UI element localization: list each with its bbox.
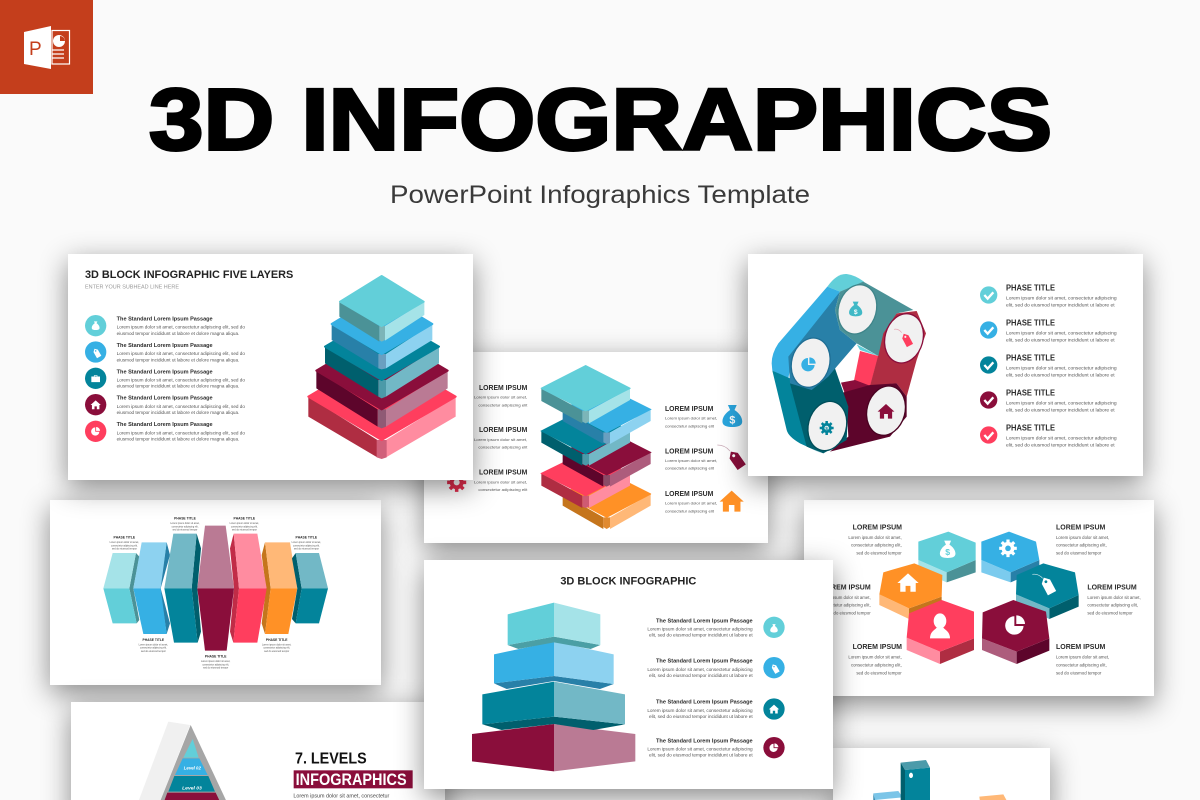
icon: pie [801, 357, 816, 371]
text: lorem ipsum bottom right: Lorem ipsum dolor sit amet, [1056, 655, 1109, 660]
text: lorem ipsum bottom left: Lorem ipsum dolor sit amet, [848, 655, 902, 660]
icon: house [720, 491, 744, 512]
text: right lorem 2: Lorem ipsum dolor sit amet, [665, 459, 717, 463]
slide: bar chart cropped [833, 748, 1050, 800]
slide: stacked blocks [424, 352, 768, 543]
list item 4: eiusmod tempor incididunt ut labore et dolore magna aliqua. [117, 410, 239, 415]
text: right lorem 2 [665, 448, 717, 471]
text: lorem ipsum top left: consectetur adipiscing elit, [851, 543, 902, 548]
text: right lorem 1: consectetur adipiscing elit [665, 424, 715, 428]
block: teal [541, 408, 630, 466]
block: red [541, 452, 630, 508]
text: lorem ipsum middle left [817, 584, 871, 615]
text: lorem ipsum top right: consectetur adipiscing elit, [1056, 543, 1107, 548]
slide title: 3D BLOCK INFOGRAPHIC [560, 575, 696, 587]
text: left lorem 1: consectetur adipiscing elit [478, 403, 528, 407]
passage 2: The Standard Lorem Ipsum Passage [656, 658, 753, 664]
phase item 4: Lorem ipsum dolor sit amet, consectetur adipiscing [1006, 401, 1117, 406]
text: description: Lorem ipsum dolor sit amet, consectetur [293, 794, 390, 800]
passage 2: elit, sed do eiusmod tempor incididunt ut labore et [649, 673, 754, 678]
text: left lorem 2: LOREM IPSUM [479, 427, 528, 434]
phase item 2: elit, sed do eiusmod tempor incididunt ut labore et [1006, 337, 1115, 342]
hexagon: blue gear [981, 532, 1039, 582]
text: lorem ipsum top left: LOREM IPSUM [853, 524, 902, 531]
list item 1 [85, 315, 246, 336]
passage 4: The Standard Lorem Ipsum Passage [656, 738, 753, 744]
block: blue [494, 642, 614, 689]
label: phase title 7 [262, 638, 292, 653]
text: lorem ipsum middle right [1087, 584, 1141, 615]
label: phase title 4: consectetur adipiscing elit, [293, 544, 320, 547]
label: phase title 7: PHASE TITLE [266, 638, 288, 642]
text: lorem ipsum bottom right: LOREM IPSUM [1056, 644, 1106, 651]
label: phase title 7: consectetur adipiscing elit, [263, 647, 290, 650]
list item 1: Lorem ipsum dolor sit amet, consectetur adipiscing elit, sed do [117, 325, 246, 330]
text: lorem ipsum bottom right: consectetur adipiscing elit, [1056, 662, 1107, 667]
passage 1: The Standard Lorem Ipsum Passage [656, 618, 753, 624]
text: lorem ipsum bottom right: sed do eiusmod tempor [1056, 670, 1102, 675]
text: lorem ipsum bottom right [1056, 644, 1109, 675]
column: cyan [103, 553, 139, 623]
icon: red gear [447, 473, 466, 492]
icon: gear [820, 421, 834, 435]
text: left lorem 1: Lorem ipsum dolor sit amet, [474, 396, 527, 400]
passage 3: elit, sed do eiusmod tempor incididunt ut labore et [649, 714, 754, 719]
block: cyan [541, 366, 630, 423]
subtitle: PowerPoint Infographics Template [390, 181, 810, 209]
column: teal right [292, 553, 328, 623]
block: blue [563, 388, 651, 444]
text: lorem ipsum middle right: Lorem ipsum dolor sit amet, [1087, 595, 1141, 600]
label: phase title 5 [139, 638, 168, 653]
label: phase title 5: sed do eiusmod tempor [141, 650, 166, 653]
block: maroon [472, 724, 635, 771]
text: lorem ipsum bottom left: consectetur adipiscing elit, [851, 662, 902, 667]
passage 2 [647, 658, 754, 678]
list item 3: Lorem ipsum dolor sit amet, consectetur adipiscing elit, sed do [117, 378, 246, 383]
label: phase title 1 [110, 536, 139, 551]
heading: 7 levels: 7. LEVELS [295, 750, 367, 767]
passage 3: Lorem ipsum dolor sit amet, consectetur adipiscing [647, 708, 753, 713]
label: phase title 3: Lorem ipsum dolor sit amet, [230, 522, 259, 525]
icon: gear: $ [825, 426, 828, 432]
column: teal [164, 534, 201, 643]
phase item 2: PHASE TITLE [1006, 319, 1056, 328]
passage 1 [647, 618, 754, 638]
label: phase title 4: Lorem ipsum dolor sit amet, [292, 541, 321, 544]
pyramid: blue layer [332, 293, 432, 369]
text: lorem ipsum top right: Lorem ipsum dolor sit amet, [1056, 535, 1109, 540]
list item 4: Lorem ipsum dolor sit amet, consectetur adipiscing elit, sed do [117, 404, 246, 409]
text: right lorem 3: consectetur adipiscing elit [665, 509, 715, 513]
label: phase title 2 [170, 517, 200, 532]
phase item 5: elit, sed do eiusmod tempor incididunt ut labore et [1006, 442, 1115, 447]
label: phase title 6: PHASE TITLE [205, 655, 227, 659]
text: right lorem 3: Lorem ipsum dolor sit amet, [665, 502, 717, 506]
text: lorem ipsum middle right: LOREM IPSUM [1087, 584, 1137, 591]
label: phase title 1: Lorem ipsum dolor sit amet, [110, 541, 139, 544]
pyramid: red layer [308, 353, 456, 459]
list item 3 [85, 368, 246, 389]
pyramid: teal layer [325, 313, 439, 398]
heading: infographics band: INFOGRAPHICS [296, 770, 407, 789]
text: lorem ipsum middle left: LOREM IPSUM [821, 584, 871, 591]
column: orange [262, 542, 297, 634]
text: lorem ipsum middle left: Lorem ipsum dolor sit amet, [817, 595, 871, 600]
phase item 1: PHASE TITLE [1006, 284, 1056, 293]
icon: money bag [722, 405, 742, 427]
pyramid: Level 02 [184, 766, 201, 771]
icon: house [878, 404, 894, 419]
text: left lorem 3: Lorem ipsum dolor sit amet, [474, 480, 527, 484]
label: phase title 4 [292, 536, 321, 551]
icon: money bag [849, 302, 862, 316]
icon: circle pie [763, 737, 785, 758]
label: phase title 1: consectetur adipiscing elit, [111, 544, 138, 547]
hexagon: cyan money [918, 532, 976, 582]
hexagon: cyan money: $ [945, 547, 950, 557]
icon: circle money [763, 617, 785, 638]
text: lorem ipsum top right: sed do eiusmod tempor [1056, 550, 1102, 555]
subhead: ENTER YOUR SUBHEAD LINE HERE [85, 284, 179, 290]
slide: seven columns [50, 500, 381, 685]
label: phase title 6: consectetur adipiscing elit, [202, 663, 229, 666]
label: phase title 3 [230, 517, 259, 532]
phase item 5 [980, 424, 1117, 447]
text: left lorem 2: consectetur adipiscing elit [478, 446, 528, 450]
list item 2: eiusmod tempor incididunt ut labore et dolore magna aliqua. [117, 357, 239, 362]
label: phase title 4: PHASE TITLE [296, 536, 318, 540]
label: phase title 2: consectetur adipiscing elit, [172, 525, 199, 528]
passage 3: The Standard Lorem Ipsum Passage [656, 700, 753, 706]
block: cyan [508, 603, 600, 649]
list item 2 [85, 341, 246, 363]
label: phase title 4: sed do eiusmod tempor [294, 548, 319, 551]
label: phase title 3: consectetur adipiscing elit, [231, 525, 258, 528]
slide: hexagon infographic [804, 500, 1154, 696]
icon: circle tag [763, 657, 785, 678]
list item 4: The Standard Lorem Ipsum Passage [117, 396, 213, 402]
bar: orange [979, 794, 1007, 800]
label: phase title 3: PHASE TITLE [234, 517, 256, 521]
text: lorem ipsum top right: LOREM IPSUM [1056, 524, 1106, 531]
label: phase title 5: Lorem ipsum dolor sit amet, [139, 643, 168, 646]
hexagon: orange home [879, 563, 942, 619]
list item 5 [85, 421, 246, 442]
text: lorem ipsum top left: Lorem ipsum dolor sit amet, [848, 535, 902, 540]
slide title: 3D BLOCK INFOGRAPHIC FIVE LAYERS [85, 269, 293, 281]
text: left lorem 1: LOREM IPSUM [479, 385, 528, 392]
text: lorem ipsum bottom left [848, 644, 902, 675]
passage 4: Lorem ipsum dolor sit amet, consectetur adipiscing [647, 747, 753, 752]
slide: five layer pyramid [68, 254, 473, 480]
label: phase title 7: sed do eiusmod tempor [264, 650, 289, 653]
text: lorem ipsum top left: sed do eiusmod tempor [856, 550, 902, 555]
label: phase title 7: Lorem ipsum dolor sit amet, [262, 643, 292, 646]
phase item 4 [980, 389, 1117, 412]
list item 1: The Standard Lorem Ipsum Passage [117, 317, 213, 323]
passage 1: Lorem ipsum dolor sit amet, consectetur adipiscing [647, 627, 753, 632]
list item 2: Lorem ipsum dolor sit amet, consectetur adipiscing elit, sed do [117, 351, 246, 356]
list item 3: The Standard Lorem Ipsum Passage [117, 369, 213, 375]
powerpoint logo: P [29, 39, 42, 60]
text: left lorem 3 [474, 470, 528, 492]
slide: pentagon ring [748, 254, 1143, 476]
list item 1: eiusmod tempor incididunt ut labore et dolore magna aliqua. [117, 331, 239, 336]
text: right lorem 2: LOREM IPSUM [665, 448, 714, 455]
powerpoint logo [0, 0, 93, 94]
phase item 3: PHASE TITLE [1006, 354, 1056, 363]
label: phase title 2: sed do eiusmod tempor [172, 529, 198, 532]
passage 2: Lorem ipsum dolor sit amet, consectetur adipiscing [647, 667, 753, 672]
slide: 3D block infographic [424, 560, 833, 789]
text: lorem ipsum middle right: sed do eiusmod tempor [1087, 610, 1133, 615]
text: lorem ipsum middle left: consectetur adipiscing elit, [820, 603, 871, 608]
phase item 2: Lorem ipsum dolor sit amet, consectetur adipiscing [1006, 331, 1117, 336]
text: right lorem 1: Lorem ipsum dolor sit amet, [665, 417, 717, 421]
column: maroon [197, 526, 234, 651]
list item 2: The Standard Lorem Ipsum Passage [117, 343, 213, 349]
phase item 3: elit, sed do eiusmod tempor incididunt ut labore et [1006, 372, 1115, 377]
phase item 3 [980, 354, 1117, 377]
block: teal [482, 682, 625, 730]
bar: blue [873, 791, 903, 800]
text: lorem ipsum middle right: consectetur adipiscing elit, [1087, 603, 1138, 608]
label: phase title 1: PHASE TITLE [114, 536, 136, 540]
passage 4: elit, sed do eiusmod tempor incididunt ut labore et [649, 753, 754, 758]
main title: 3D INFOGRAPHICS [149, 72, 1052, 168]
text: right lorem 1 [665, 406, 717, 428]
label: phase title 5: consectetur adipiscing elit, [140, 647, 167, 650]
list item 4 [85, 394, 246, 415]
text: lorem ipsum top right [1056, 524, 1109, 555]
text: right lorem 3: LOREM IPSUM [665, 491, 714, 498]
label: phase title 6 [201, 655, 231, 670]
list item 5: eiusmod tempor incididunt ut labore et dolore magna aliqua. [117, 436, 239, 441]
text: lorem ipsum bottom left: sed do eiusmod tempor [856, 670, 902, 675]
text: lorem ipsum top left [848, 524, 902, 555]
hexagon: maroon pie [982, 600, 1049, 664]
icon: money bag: $ [729, 415, 735, 427]
phase item 2 [980, 319, 1117, 342]
phase item 4: PHASE TITLE [1006, 389, 1056, 398]
label: phase title 3: sed do eiusmod tempor [232, 529, 257, 532]
text: left lorem 1 [474, 385, 528, 407]
phase item 5: PHASE TITLE [1006, 424, 1056, 433]
pyramid: Level 03 [182, 786, 202, 792]
label: phase title 1: sed do eiusmod tempor [112, 548, 137, 551]
list item 5: Lorem ipsum dolor sit amet, consectetur adipiscing elit, sed do [117, 430, 246, 435]
block: orange [563, 472, 651, 529]
text: left lorem 3: LOREM IPSUM [479, 470, 528, 477]
label: phase title 6: sed do eiusmod tempor [203, 667, 228, 670]
hexagon: red person [907, 600, 974, 664]
phase item 3: Lorem ipsum dolor sit amet, consectetur adipiscing [1006, 366, 1117, 371]
passage 3 [647, 700, 754, 719]
phase item 4: elit, sed do eiusmod tempor incididunt ut labore et [1006, 407, 1115, 412]
icon: tag [894, 329, 913, 347]
label: phase title 5: PHASE TITLE [143, 638, 165, 642]
pentagon ring [772, 274, 930, 456]
pyramid [138, 722, 227, 800]
label: phase title 2: Lorem ipsum dolor sit amet, [170, 522, 200, 525]
phase item 1: Lorem ipsum dolor sit amet, consectetur adipiscing [1006, 296, 1117, 301]
text: left lorem 2 [474, 427, 528, 450]
text: lorem ipsum bottom left: LOREM IPSUM [853, 644, 902, 651]
text: right lorem 1: LOREM IPSUM [665, 406, 714, 413]
label: phase title 6: Lorem ipsum dolor sit amet, [201, 660, 231, 663]
phase item 1: elit, sed do eiusmod tempor incididunt ut labore et [1006, 302, 1115, 307]
text: right lorem 3 [665, 491, 717, 513]
icon: price tag [717, 445, 746, 470]
phase item 1 [980, 284, 1117, 307]
slide: seven levels [71, 702, 445, 800]
list item 5: The Standard Lorem Ipsum Passage [117, 422, 213, 428]
text: right lorem 2: consectetur adipiscing elit [665, 467, 715, 471]
column: blue [133, 542, 170, 634]
icon: circle home [763, 698, 785, 720]
text: left lorem 2: Lorem ipsum dolor sit amet, [474, 438, 527, 442]
passage 4 [647, 738, 754, 758]
bar: teal [901, 760, 930, 800]
icon: money bag: $ [854, 309, 858, 316]
block: maroon [563, 430, 651, 487]
label: phase title 2: PHASE TITLE [174, 517, 197, 521]
hexagon: teal tag [1016, 563, 1079, 619]
passage 1: elit, sed do eiusmod tempor incididunt ut labore et [649, 633, 754, 638]
text: left lorem 3: consectetur adipiscing elit [478, 488, 528, 492]
text: lorem ipsum middle left: sed do eiusmod tempor [825, 610, 871, 615]
column: red [230, 534, 267, 643]
pyramid: cyan layer [339, 276, 424, 342]
phase item 5: Lorem ipsum dolor sit amet, consectetur adipiscing [1006, 436, 1117, 441]
pyramid: maroon layer [316, 332, 448, 428]
list item 3: eiusmod tempor incididunt ut labore et dolore magna aliqua. [117, 384, 239, 389]
